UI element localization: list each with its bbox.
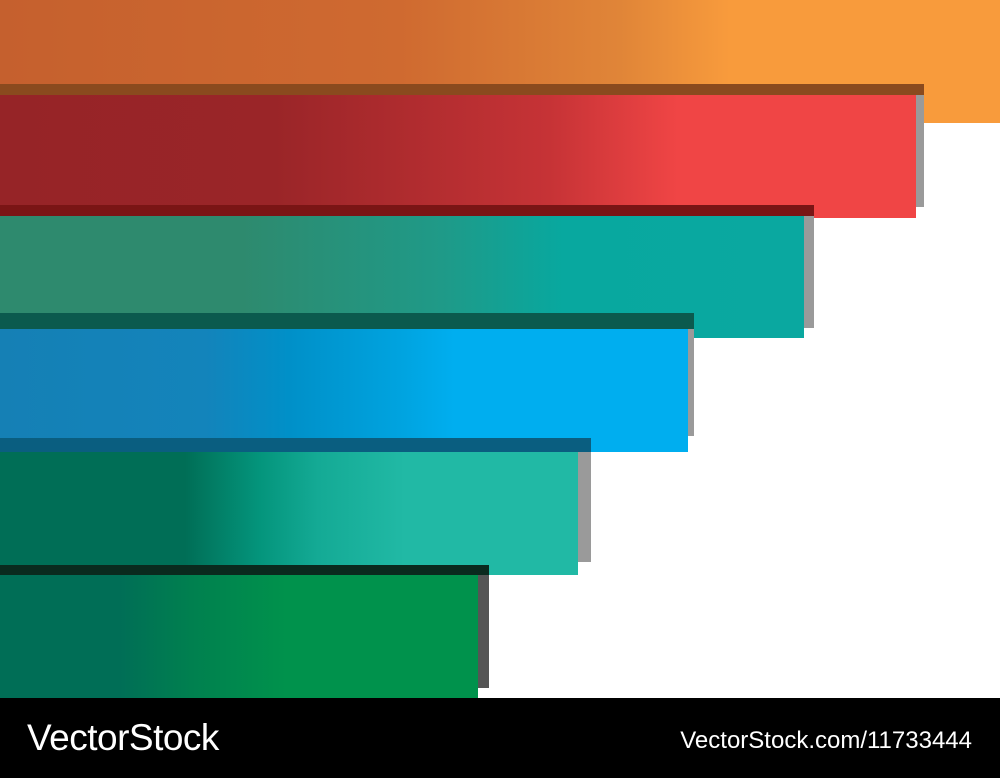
bar 2: red with shadow bbox=[0, 84, 924, 218]
bar 3: teal with shadow bbox=[0, 205, 814, 338]
bar 5: sea green with shadow bbox=[0, 438, 591, 575]
bar 1: orange bbox=[0, 0, 1000, 123]
url text: VectorStock.com/11733444 bbox=[680, 727, 972, 754]
bar 4: blue with shadow bbox=[0, 313, 694, 452]
logo text: VectorStock bbox=[27, 717, 219, 758]
bar 6: green with shadow bbox=[0, 565, 489, 698]
footer bar bbox=[0, 698, 1000, 778]
